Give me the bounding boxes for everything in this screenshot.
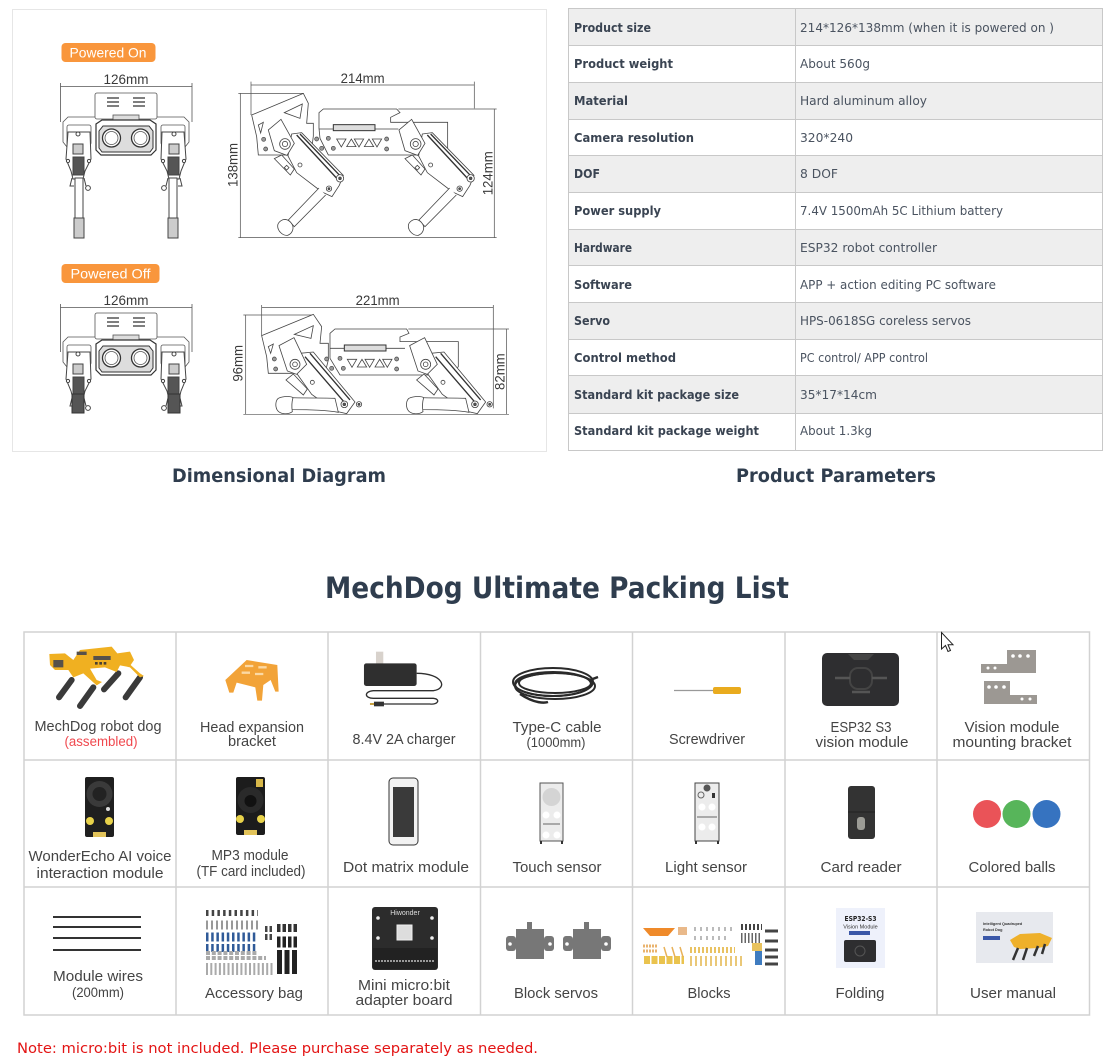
item: ESP32 S3 vision module: ESP32 S3 — [830, 719, 892, 736]
item: user manual: Intelligent Quadruped — [983, 922, 1023, 926]
table: product parameters: ESP32 robot controller — [800, 240, 938, 255]
item: blocks — [643, 927, 778, 1002]
heading: dimensional diagram: Dimensional Diagram — [172, 465, 386, 487]
table: product parameters: Material — [574, 93, 628, 108]
front view powered off — [60, 292, 192, 413]
item: WonderEcho AI voice module — [28, 777, 172, 882]
item: dot matrix module: Dot matrix module — [343, 859, 469, 876]
item: WonderEcho AI voice module: interaction module — [36, 865, 164, 882]
item: block servos — [506, 922, 611, 1002]
table: product parameters: PC control/ APP control — [800, 350, 928, 365]
item: blocks: Blocks — [688, 985, 730, 1002]
item: card reader — [820, 786, 902, 876]
item: card reader: Card reader — [820, 859, 902, 876]
side view powered on: 124mm — [480, 151, 496, 195]
side view powered off: 96mm — [229, 345, 245, 382]
front view powered on — [60, 71, 192, 238]
item: mini micro:bit adapter board — [356, 907, 452, 1009]
item: touch sensor — [512, 783, 602, 876]
title: packing list: MechDog Ultimate Packing List — [325, 571, 789, 605]
item: MechDog robot dog: (assembled) — [64, 734, 138, 749]
item: light sensor: Light sensor — [665, 859, 747, 876]
item: ESP32 S3 vision module: vision module — [816, 734, 908, 751]
item: folding manual: Folding — [836, 985, 884, 1002]
badge: powered off — [62, 264, 160, 283]
item: screwdriver — [669, 687, 745, 748]
table: product parameters: HPS-0618SG coreless servos — [800, 313, 971, 328]
table: product parameters: 35*17*14cm — [800, 387, 877, 402]
side view powered off: 221mm — [356, 292, 400, 308]
item: MP3 module: MP3 module — [212, 847, 288, 864]
item: Type-C cable: (1000mm) — [526, 735, 586, 750]
item: user manual — [970, 912, 1056, 1002]
table: product parameters: 8 DOF — [800, 166, 838, 181]
item: module wires: (200mm) — [72, 985, 124, 1000]
item: colored balls — [968, 800, 1060, 876]
packing list grid — [24, 632, 1090, 1015]
item: head expansion bracket: Head expansion — [200, 719, 304, 736]
front view powered off: 126mm — [104, 292, 148, 308]
item: folding manual: ESP32-S3 — [844, 915, 877, 923]
side view powered on — [224, 70, 497, 238]
item: mini micro:bit adapter board: adapter board — [356, 992, 452, 1009]
table: product parameters: DOF — [574, 166, 600, 181]
item: MechDog robot dog: MechDog robot dog — [34, 718, 162, 735]
table: product parameters: Standard kit package weight — [574, 423, 759, 438]
item: light sensor — [665, 783, 747, 876]
item: Type-C cable — [512, 668, 602, 750]
table: product parameters: About 560g — [800, 56, 870, 71]
item: vision module mounting bracket — [952, 650, 1072, 751]
panel: dimensional diagram — [12, 10, 546, 452]
table: product parameters: Camera resolution — [574, 130, 694, 145]
table: product parameters: Servo — [574, 313, 610, 328]
item: module wires — [53, 917, 143, 1000]
heading: product parameters: Product Parameters — [736, 465, 936, 487]
item: mini micro:bit adapter board: Hiwonder — [390, 910, 420, 917]
side view powered on: 138mm — [224, 143, 240, 187]
badge: powered on: Powered On — [70, 44, 146, 60]
table: product parameters: Product size — [574, 20, 651, 35]
note: micro:bit not included: Note: micro:bit is not included. Please purchase separately as needed. — [17, 1041, 538, 1057]
table: product parameters: 7.4V 1500mAh 5C Lithium battery — [800, 203, 1004, 218]
item: colored balls: Colored balls — [968, 859, 1056, 876]
item: accessory bag: Accessory bag — [205, 985, 303, 1002]
item: touch sensor: Touch sensor — [512, 859, 602, 876]
item: MP3 module: (TF card included) — [196, 863, 306, 880]
item: MP3 module — [196, 777, 306, 880]
table: product parameters: 214*126*138mm (when it is powered on ) — [800, 20, 1054, 35]
side view powered on: 214mm — [341, 70, 385, 86]
badge: powered on — [62, 43, 156, 62]
item: dot matrix module — [343, 778, 469, 876]
icon: mouse cursor — [942, 632, 953, 652]
side view powered off — [229, 292, 509, 414]
table: product parameters — [568, 8, 1103, 450]
table: product parameters: Standard kit package size — [574, 387, 739, 402]
item: block servos: Block servos — [514, 985, 598, 1002]
side view powered off: 82mm — [491, 353, 507, 390]
table: product parameters: 320*240 — [800, 130, 853, 145]
item: folding manual — [836, 908, 885, 1002]
item: user manual: User manual — [970, 985, 1056, 1002]
item: accessory bag — [205, 913, 303, 1002]
table: product parameters: Control method — [574, 350, 676, 365]
item: screwdriver: Screwdriver — [669, 731, 745, 748]
table: product parameters: Product weight — [574, 56, 673, 71]
table: product parameters: About 1.3kg — [800, 423, 872, 438]
front view powered on: 126mm — [104, 71, 148, 87]
item: folding manual: Vision Module — [843, 924, 878, 930]
item: mini micro:bit adapter board: Mini micro:bit — [358, 977, 451, 994]
item: vision module mounting bracket: Vision module — [964, 719, 1060, 736]
item: MechDog robot dog — [34, 647, 162, 749]
item: vision module mounting bracket: mounting bracket — [952, 734, 1072, 751]
item: charger: 8.4V 2A charger — [352, 731, 456, 748]
item: user manual: Robot Dog — [983, 928, 1003, 932]
table: product parameters: Hard aluminum alloy — [800, 93, 928, 108]
table: product parameters: APP + action editing PC software — [800, 277, 996, 292]
table: product parameters: Power supply — [574, 203, 661, 218]
badge: powered off: Powered Off — [70, 266, 151, 282]
item: ESP32 S3 vision module — [816, 653, 908, 751]
item: module wires: Module wires — [53, 968, 143, 985]
item: WonderEcho AI voice module: WonderEcho AI voice — [28, 848, 172, 865]
table: product parameters: Software — [574, 277, 632, 292]
item: head expansion bracket: bracket — [228, 733, 277, 750]
item: charger — [352, 652, 456, 748]
item: Type-C cable: Type-C cable — [512, 719, 602, 736]
table: product parameters: Hardware — [574, 240, 632, 255]
item: head expansion bracket — [200, 660, 304, 750]
